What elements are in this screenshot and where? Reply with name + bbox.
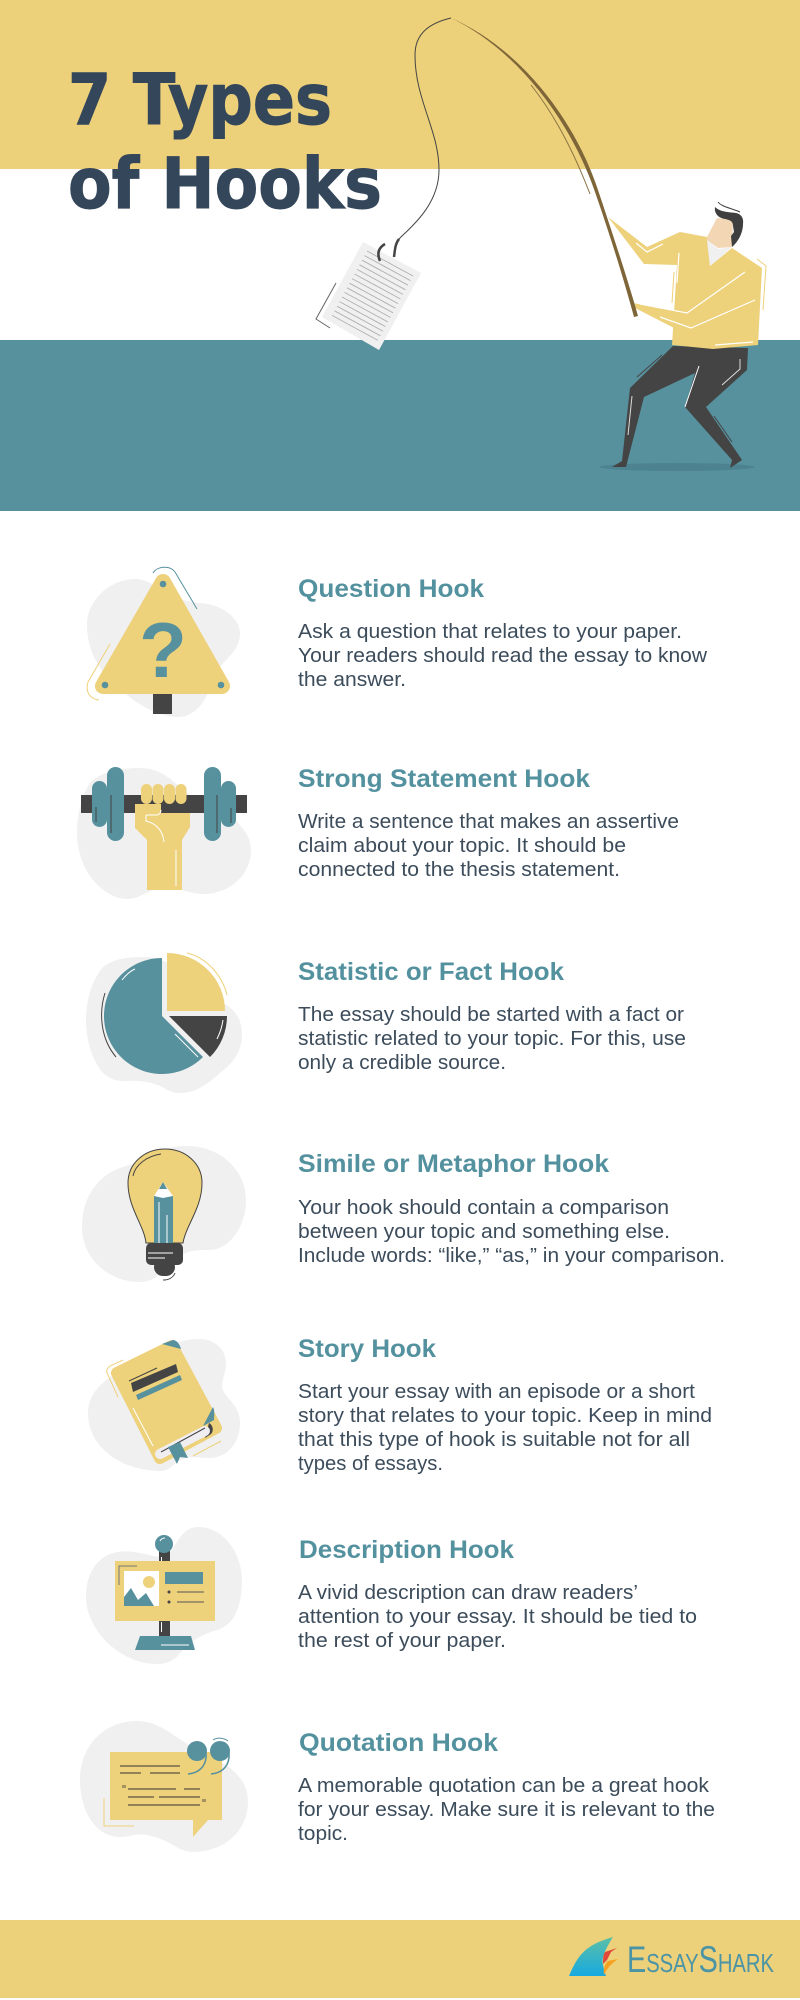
- text block: the rest of your paper.: [298, 1629, 506, 1652]
- text block: [298, 620, 707, 691]
- text block: A memorable quotation can be a great hook: [298, 1774, 710, 1797]
- footer band: [0, 1920, 800, 1998]
- text block: connected to the thesis statement.: [298, 858, 620, 881]
- ground shadow: [599, 463, 755, 471]
- text block: Write a sentence that makes an assertive: [298, 810, 679, 833]
- text block: only a credible source.: [298, 1051, 506, 1074]
- icon: display board on stand: [86, 1527, 242, 1664]
- text block: [298, 1774, 715, 1845]
- title: 7 Types: [68, 59, 332, 141]
- icon: closed book with bookmark: [88, 1339, 240, 1471]
- text block: story that relates to your topic. Keep in mind: [298, 1404, 712, 1427]
- heading: Description Hook: [299, 1536, 514, 1564]
- heading: Strong Statement Hook: [298, 765, 590, 793]
- icon: warning sign with question mark: [87, 567, 240, 717]
- text block: [298, 1196, 725, 1267]
- text block: Ask a question that relates to your paper.: [298, 620, 682, 643]
- text block: [298, 1380, 712, 1475]
- panel: quotation hook: [80, 1721, 715, 1852]
- text block: between your topic and something else.: [298, 1220, 670, 1243]
- text block: for your essay. Make sure it is relevant to the: [298, 1798, 715, 1821]
- icon: light bulb with pencil: [82, 1146, 246, 1282]
- sweater: [608, 217, 766, 349]
- icon: warning sign with question mark: ?: [139, 606, 187, 694]
- text block: [298, 1003, 686, 1074]
- text block: A vivid description can draw readers’: [298, 1581, 638, 1604]
- text block: the answer.: [298, 668, 406, 691]
- text block: Include words: “like,” “as,” in your comparison.: [298, 1244, 725, 1267]
- logo: EssayShark: [569, 1937, 775, 1980]
- text block: attention to your essay. It should be tied to: [298, 1605, 697, 1628]
- head: [707, 202, 743, 266]
- fishing rod: [451, 18, 638, 317]
- text block: Your hook should contain a comparison: [298, 1196, 669, 1219]
- text block: The essay should be started with a fact or: [298, 1003, 684, 1026]
- title: [68, 59, 382, 225]
- text block: that this type of hook is suitable not for all: [298, 1428, 690, 1451]
- heading: Quotation Hook: [299, 1729, 498, 1757]
- heading: Statistic or Fact Hook: [298, 958, 564, 986]
- text block: Start your essay with an episode or a short: [298, 1380, 695, 1403]
- text block: types of essays.: [298, 1452, 443, 1475]
- text block: Your readers should read the essay to know: [298, 644, 707, 667]
- text block: statistic related to your topic. For this, use: [298, 1027, 686, 1050]
- panel: strong statement hook: [77, 765, 679, 899]
- trousers: [612, 346, 748, 468]
- panel: simile or metaphor hook: [82, 1146, 725, 1282]
- illustration: fisherman with rod: [451, 18, 766, 471]
- text block: [298, 1581, 697, 1652]
- icon: speech bubble with quotation marks: [80, 1721, 248, 1852]
- text block: topic.: [298, 1822, 348, 1845]
- heading: Simile or Metaphor Hook: [298, 1150, 609, 1178]
- icon: shark fin: [569, 1937, 618, 1976]
- icon: fist lifting dumbbell: [77, 767, 251, 899]
- text block: [298, 810, 679, 881]
- paper sheet: [316, 242, 421, 350]
- heading: Question Hook: [298, 575, 484, 603]
- header background bands: [0, 0, 800, 511]
- panel: question hook: [87, 567, 707, 717]
- illustration: hooked paper on fishing line: [316, 18, 451, 350]
- fishing line: [394, 18, 451, 257]
- hook: [378, 239, 399, 261]
- title: of Hooks: [68, 143, 382, 225]
- text block: claim about your topic. It should be: [298, 834, 626, 857]
- panel: story hook: [88, 1335, 712, 1475]
- panel: description hook: [86, 1527, 697, 1664]
- heading: Story Hook: [298, 1335, 436, 1363]
- panel: statistic or fact hook: [86, 953, 686, 1093]
- icon: pie chart: [86, 953, 242, 1093]
